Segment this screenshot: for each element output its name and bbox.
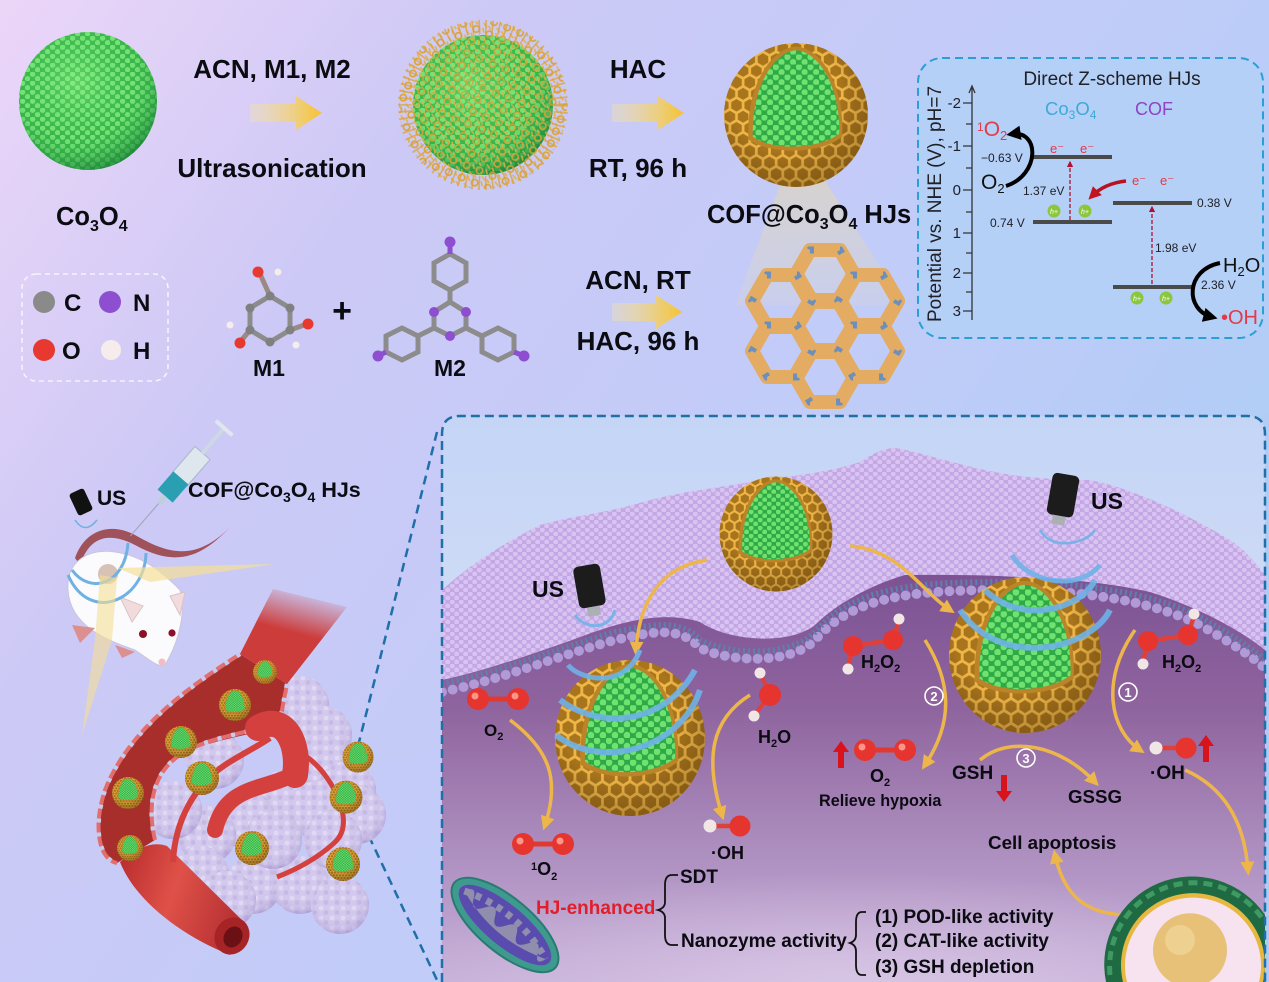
- potential values: 2.36 V: [1201, 278, 1236, 292]
- label: Co3O4: 4: [1090, 108, 1097, 122]
- electrons: [1050, 141, 1174, 188]
- right pathway molecules and arrows: O: [880, 652, 894, 672]
- panel: cellular mechanism: [437, 416, 1265, 982]
- left pathway molecules and arrows: 1: [531, 861, 537, 873]
- beam: zoom to COF: [735, 170, 905, 305]
- right pathway molecules and arrows: 2: [874, 663, 880, 675]
- arrows from entry particle: [636, 546, 950, 650]
- label: COF@Co3O4 HJs injection: HJs: [315, 478, 361, 502]
- label: SDT: SDT: [680, 867, 718, 888]
- heading: Direct Z-scheme HJs: Direct Z-scheme HJs: [1023, 69, 1201, 90]
- label: Co3O4: O: [1075, 98, 1090, 119]
- label: COF@Co3O4 HJs: COF@Co: [707, 201, 820, 229]
- right pathway molecules and arrows: Relieve hypoxia: [819, 792, 942, 810]
- arrow: step two: [612, 96, 684, 130]
- label: Co3O4: 3: [90, 218, 99, 235]
- bottom glow: [528, 895, 1114, 982]
- potential values: 0.74 V: [990, 216, 1025, 230]
- sphere: monomers adsorbed on core: [399, 21, 567, 189]
- icon: syringe: [122, 419, 234, 543]
- electrons: e⁻: [1080, 141, 1094, 156]
- lower tube: [120, 844, 247, 955]
- right pathway molecules and arrows: 2: [1175, 663, 1181, 675]
- potential values: [981, 151, 1236, 292]
- label: Co3O4: 3: [1069, 108, 1076, 122]
- list: activities: (1) POD-like activity: [875, 907, 1054, 928]
- probe: right US: [1045, 472, 1080, 527]
- tail: [75, 524, 233, 565]
- right pathway molecules and arrows: [819, 608, 1248, 915]
- label: US left: US: [532, 576, 564, 602]
- tumour cell cluster: [144, 676, 386, 934]
- label: HJ-enhanced: HJ-enhanced: [536, 898, 655, 919]
- label: US: US: [97, 487, 126, 510]
- vessel wall dashes: [99, 654, 240, 863]
- legend: atoms: N: [133, 290, 150, 317]
- sphere: left particle: [555, 660, 705, 816]
- left pathway molecules and arrows: 2: [497, 731, 503, 743]
- species labels: O: [984, 118, 1000, 141]
- right pathway molecules and arrows: O: [870, 766, 884, 786]
- label: Co3O4: O: [99, 203, 119, 231]
- label: HAC, 96 h: HAC, 96 h: [577, 326, 699, 356]
- label: Co3O4: 4: [119, 218, 128, 235]
- panel border: mechanism: [442, 416, 1265, 982]
- label: ACN, M1, M2: ACN, M1, M2: [193, 54, 351, 84]
- right pathway molecules and arrows: 1: [1124, 685, 1132, 700]
- axis title: Potential vs. NHE (V), pH=7: [925, 86, 946, 322]
- right pathway molecules and arrows: H: [1162, 652, 1175, 672]
- electrons: e⁻: [1050, 141, 1064, 156]
- label: RT, 96 h: RT, 96 h: [589, 153, 687, 183]
- bracket: HJ-enhanced: [658, 875, 678, 945]
- label: Co3O4: Co: [56, 203, 90, 231]
- yellow beam vertical: [82, 575, 117, 735]
- species labels: 2: [1000, 128, 1007, 143]
- right pathway molecules and arrows: Cell apoptosis: [988, 832, 1116, 853]
- panel: Z-scheme energy diagram: 2: [997, 181, 1005, 196]
- molecule: M1: [226, 266, 314, 348]
- label: COF@Co3O4 HJs: 3: [820, 216, 829, 233]
- label: COF@Co3O4 HJs: O: [829, 201, 848, 229]
- left pathway molecules and arrows: 2: [771, 738, 777, 750]
- legend: atoms: [22, 274, 168, 381]
- list: activities: (2) CAT-like activity: [875, 931, 1049, 952]
- upper tube: [240, 589, 347, 684]
- left pathway molecules and arrows: ·OH: [711, 843, 744, 863]
- mouse feet: [72, 625, 135, 658]
- step numbers: [925, 683, 1137, 767]
- legend: atoms: C: [64, 290, 81, 317]
- mouse with injection: [68, 520, 233, 666]
- plus sign: +: [332, 292, 352, 330]
- blood vessel: [99, 589, 347, 961]
- transfer arrow: [1092, 181, 1126, 196]
- cell interior: [442, 560, 1265, 982]
- molecule: M2: [372, 236, 530, 362]
- energy levels: [1033, 155, 1192, 289]
- axis: [963, 86, 975, 320]
- particle entering membrane: [720, 476, 832, 592]
- panel: Z-scheme energy diagram: H: [1223, 255, 1237, 277]
- arrow: step one: [250, 96, 322, 130]
- left pathway molecules and arrows: [467, 668, 791, 883]
- label: COF@Co3O4 HJs: HJs: [857, 201, 911, 229]
- nanoparticles in vessel and tumour: [112, 660, 374, 881]
- axis tick labels: -1: [948, 138, 961, 155]
- icon: US probe small: [69, 488, 93, 516]
- right pathway molecules and arrows: O: [1181, 652, 1195, 672]
- axis tick labels: 3: [953, 303, 961, 320]
- left pathway molecules and arrows: O: [484, 721, 497, 740]
- panel: Z-scheme energy diagram: •OH: [1221, 307, 1258, 329]
- species labels: 1: [977, 120, 984, 134]
- ultrasound waves: [68, 520, 146, 602]
- panel: Z-scheme energy diagram: 2: [1237, 264, 1245, 279]
- label: Nanozyme activity: Nanozyme activity: [681, 931, 847, 952]
- right pathway molecules and arrows: 2: [1195, 663, 1201, 675]
- potential values: −0.63 V: [981, 151, 1023, 165]
- axis tick labels: -2: [948, 95, 961, 112]
- probe: left US: [573, 564, 606, 616]
- potential values: 1.98 eV: [1155, 241, 1196, 255]
- panel background: [442, 416, 1265, 588]
- electrons: e⁻: [1132, 173, 1146, 188]
- right pathway molecules and arrows: 3: [1022, 751, 1030, 766]
- potential values: 1.37 eV: [1023, 184, 1064, 198]
- panel: Z-scheme energy diagram: O: [1245, 255, 1260, 277]
- label: US right: US: [1091, 488, 1123, 514]
- label: COF@Co3O4 HJs injection: COF@Co: [188, 478, 283, 502]
- open lumen: [99, 654, 287, 863]
- right pathway molecules and arrows: ·OH: [1150, 763, 1185, 784]
- axis tick labels: 1: [953, 225, 961, 242]
- right pathway molecules and arrows: 2: [884, 777, 890, 789]
- sphere: right particle: [949, 577, 1101, 733]
- electrons: e⁻: [1160, 173, 1174, 188]
- label: COF@Co3O4 HJs: 4: [848, 216, 857, 233]
- icon: mitochondrion: [450, 876, 560, 974]
- axis tick labels: 0: [953, 182, 961, 199]
- band gap arrows: [1070, 162, 1152, 284]
- holes: [1048, 204, 1172, 304]
- right pathway molecules and arrows: H: [861, 652, 874, 672]
- red indicators: [833, 735, 1214, 802]
- label: HAC: HAC: [610, 54, 666, 84]
- label: Co3O4: Co: [1045, 98, 1069, 119]
- ultrasound waves: [556, 530, 1110, 752]
- right pathway molecules and arrows: 2: [894, 663, 900, 675]
- label: M2: M2: [434, 355, 466, 381]
- membrane tails: [442, 582, 1265, 684]
- label: COF: COF: [1135, 99, 1173, 119]
- label: Ultrasonication: Ultrasonication: [177, 153, 367, 183]
- left pathway molecules and arrows: O: [537, 859, 551, 879]
- label: M1: M1: [253, 355, 285, 381]
- list: activities: (3) GSH depletion: [875, 957, 1034, 978]
- label: COF@Co3O4 HJs injection: 4: [308, 489, 316, 505]
- mouse eyes: [139, 630, 147, 638]
- mouse ears: [120, 592, 185, 622]
- sphere: COF@Co3O4 heterojunction: [724, 43, 868, 187]
- right pathway molecules and arrows: GSH: [952, 763, 993, 784]
- right pathway molecules and arrows: 2: [930, 689, 938, 704]
- axis tick labels: [948, 95, 961, 320]
- sphere: Co3O4 core: [19, 32, 157, 170]
- legend: atoms: O: [62, 338, 81, 365]
- bracket: nanozyme: [850, 912, 866, 975]
- dashed zoom lines: [347, 432, 437, 980]
- legend: atoms: H: [133, 338, 150, 365]
- left pathway molecules and arrows: O: [777, 727, 791, 747]
- panel: Z-scheme energy diagram: O: [981, 171, 997, 194]
- label: COF@Co3O4 HJs injection: 3: [283, 489, 291, 505]
- capillaries: [173, 724, 343, 877]
- potential values: 0.38 V: [1197, 196, 1232, 210]
- arrow: COF synthesis: [612, 295, 682, 329]
- axis tick labels: 2: [953, 265, 961, 282]
- reaction arcs: [1006, 134, 1032, 186]
- label: COF@Co3O4 HJs injection: O: [291, 478, 308, 502]
- membrane lower bead row: [442, 590, 1265, 692]
- icon: tumour cell with nucleus: [1104, 877, 1265, 982]
- left pathway molecules and arrows: H: [758, 727, 771, 747]
- mouse body: [68, 551, 182, 666]
- COF framework rosette: [752, 250, 898, 402]
- panel: Z-scheme energy diagram: [918, 58, 1263, 338]
- injection site: [98, 564, 118, 584]
- right pathway molecules and arrows: GSSG: [1068, 786, 1122, 807]
- list: activities: [875, 907, 1054, 978]
- membrane top layer: [442, 448, 1265, 680]
- left pathway molecules and arrows: 2: [551, 871, 557, 883]
- yellow beam horizontal: [118, 564, 275, 582]
- label: ACN, RT: ACN, RT: [585, 265, 691, 295]
